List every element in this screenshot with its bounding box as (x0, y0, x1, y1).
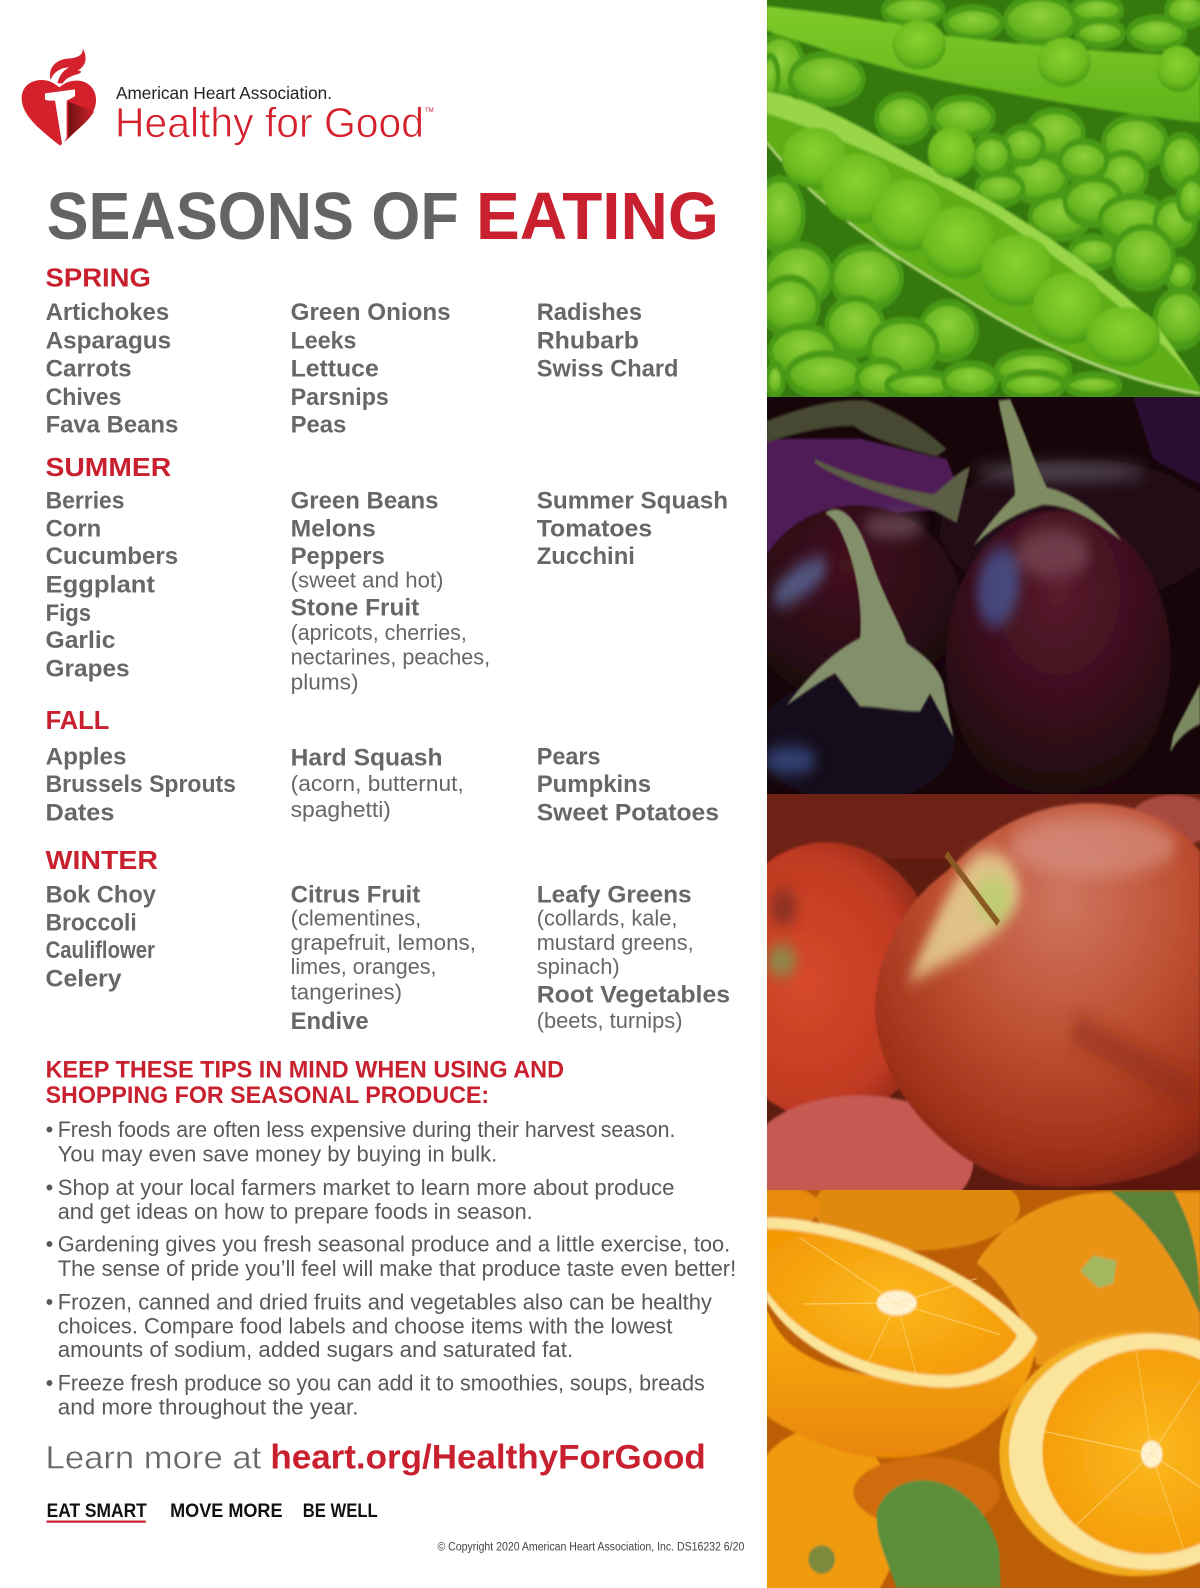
list: spring column 1: Fava Beans (46, 411, 178, 438)
tip 3 (46, 1232, 736, 1281)
tip 1: You may even save money by buying in bulk. (58, 1142, 497, 1167)
list: summer column 2: plums) (291, 670, 358, 695)
list: summer column 1 (46, 487, 178, 682)
list: winter column 1 (46, 881, 156, 992)
tip 3: • (46, 1232, 53, 1257)
title: SEASONS OF (47, 180, 459, 254)
list: spring column 2 (291, 299, 451, 438)
tip 1: • (46, 1117, 53, 1142)
list: summer column 2: nectarines, peaches, (291, 644, 490, 669)
list: spring column 3: Swiss Chard (537, 356, 678, 383)
heading: spring: SPRING (46, 263, 151, 293)
list: winter column 1: Bok Choy (46, 881, 156, 908)
heading: winter: WINTER (46, 845, 158, 875)
list: winter column 3: spinach) (537, 954, 620, 979)
list: fall column 1: Apples (46, 744, 127, 771)
heading: tips (46, 1056, 564, 1109)
list: fall column 2: spaghetti) (291, 797, 391, 822)
list: spring column 1 (46, 299, 178, 438)
list: summer column 1: Eggplant (46, 571, 155, 598)
heading: summer: SUMMER (46, 452, 171, 482)
list: fall column 1: Dates (46, 799, 114, 826)
list: summer column 2: Melons (291, 516, 376, 543)
list: summer column 2: Peppers (291, 543, 385, 570)
text block: tips list (46, 1117, 736, 1420)
list: spring column 1: Chives (46, 384, 122, 411)
call to action: learn more: heart.org/HealthyForGood (270, 1438, 706, 1476)
tagline: eat smart, move more, be well: MOVE MORE (170, 1501, 283, 1522)
call to action: learn more (46, 1438, 706, 1476)
tip 2: and get ideas on how to prepare foods in season. (58, 1199, 533, 1224)
list: summer column 2: (sweet and hot) (291, 567, 444, 592)
list: winter column 2: limes, oranges, (291, 954, 436, 979)
heading: fall: FALL (46, 705, 109, 735)
list: summer column 2: Stone Fruit (291, 595, 419, 622)
heading: tips: KEEP THESE TIPS IN MIND WHEN USING AND (46, 1056, 564, 1083)
list: fall column 2 (291, 745, 464, 822)
list: spring column 1: Carrots (46, 356, 132, 383)
tip 4: amounts of sodium, added sugars and saturated fat. (58, 1337, 573, 1362)
tip 4: Frozen, canned and dried fruits and vegetables also can be healthy (58, 1289, 712, 1314)
tip 5: • (46, 1370, 53, 1395)
list: summer column 1: Corn (46, 516, 101, 543)
list: winter column 2: Citrus Fruit (291, 881, 420, 908)
tip 5: Freeze fresh produce so you can add it to smoothies, soups, breads (58, 1370, 705, 1395)
tip 2 (46, 1175, 674, 1224)
tagline: eat smart, move more, be well: BE WELL (303, 1501, 378, 1522)
list: fall column 3: Sweet Potatoes (537, 799, 719, 826)
list: summer column 2 (291, 487, 490, 695)
list: fall column 1: Brussels Sprouts (46, 771, 236, 798)
photo: eggplants (752, 395, 1200, 806)
list: fall column 1 (46, 744, 236, 826)
list: summer column 1: Grapes (46, 655, 130, 682)
list: spring column 3: Rhubarb (537, 327, 639, 354)
list: summer column 1: Garlic (46, 627, 115, 654)
tip 5 (46, 1370, 705, 1420)
list: spring column 2: Parsnips (291, 384, 389, 411)
list: winter column 3: Root Vegetables (537, 982, 730, 1009)
title: EATING (476, 180, 719, 254)
list: fall column 3 (537, 744, 719, 826)
call to action: learn more: Learn more at (46, 1439, 261, 1475)
list: summer column 1: Berries (46, 487, 125, 514)
list: summer column 2: (apricots, cherries, (291, 620, 467, 645)
tip 4: • (46, 1289, 53, 1314)
list: summer column 2: Green Beans (291, 487, 438, 514)
list: spring column 1: Artichokes (46, 299, 169, 326)
list: summer column 3: Zucchini (537, 543, 635, 570)
trademark: TM (425, 108, 434, 114)
section: winter (46, 845, 730, 1035)
list: spring column 2: Leeks (291, 327, 356, 354)
list: winter column 3 (537, 881, 730, 1033)
list: spring column 2: Green Onions (291, 299, 451, 326)
heading: tips: SHOPPING FOR SEASONAL PRODUCE: (46, 1082, 489, 1109)
tip 2: Shop at your local farmers market to learn more about produce (58, 1175, 674, 1200)
logo: American Heart Association Healthy for Good (22, 48, 434, 146)
list: fall column 2: (acorn, butternut, (291, 771, 464, 796)
list: summer column 1: Cucumbers (46, 543, 178, 570)
list: winter column 3: mustard greens, (537, 930, 694, 955)
list: winter column 2: Endive (291, 1008, 369, 1035)
list: winter column 3: Leafy Greens (537, 881, 692, 908)
list: winter column 3: (collards, kale, (537, 906, 677, 931)
tip 2: • (46, 1175, 53, 1200)
section: spring (46, 263, 678, 438)
section: summer (46, 452, 728, 695)
tip 3: The sense of pride you’ll feel will make that produce taste even better! (58, 1256, 736, 1281)
section: fall (46, 705, 719, 826)
tagline: eat smart, move more, be well: EAT SMART (47, 1501, 147, 1522)
list: summer column 1: Figs (46, 600, 91, 627)
list: winter column 2: grapefruit, lemons, (291, 930, 476, 955)
photo: red apples (712, 790, 1200, 1228)
list: winter column 2 (291, 881, 476, 1035)
tagline: eat smart, move more, be well (47, 1501, 378, 1523)
list: summer column 3: Tomatoes (537, 516, 652, 543)
list: winter column 1: Celery (46, 965, 122, 992)
brand text: American Heart Association: American Heart Association. (116, 83, 332, 103)
tip 5: and more throughout the year. (58, 1395, 358, 1420)
tip 1 (46, 1117, 675, 1167)
list: winter column 1: Broccoli (46, 910, 137, 937)
list: winter column 1: Cauliflower (46, 937, 155, 964)
list: winter column 2: (clementines, (291, 906, 421, 931)
brand text: Healthy for Good: Healthy for Good (115, 99, 424, 146)
icon: heart and torch (22, 48, 96, 146)
list: summer column 3: Summer Squash (537, 487, 728, 514)
list: summer column 3 (537, 487, 728, 570)
tip 3: Gardening gives you fresh seasonal produce and a little exercise, too. (58, 1232, 730, 1257)
list: spring column 1: Asparagus (46, 327, 171, 354)
photo: oranges (767, 1190, 1200, 1588)
tip 4 (46, 1289, 712, 1362)
list: winter column 3: (beets, turnips) (537, 1008, 683, 1033)
list: fall column 3: Pears (537, 744, 601, 771)
list: fall column 2: Hard Squash (291, 745, 443, 772)
photo: green peas in pods (757, 0, 1200, 398)
list: fall column 3: Pumpkins (537, 771, 651, 798)
copyright: © Copyright 2020 American Heart Association, Inc. DS16232 6/20 (437, 1540, 745, 1553)
list: spring column 3 (537, 299, 678, 383)
tip 4: choices. Compare food labels and choose items with the lowest (58, 1314, 672, 1339)
list: spring column 2: Lettuce (291, 356, 379, 383)
list: spring column 2: Peas (291, 411, 346, 438)
list: winter column 2: tangerines) (291, 979, 402, 1004)
list: spring column 3: Radishes (537, 299, 642, 326)
apple stem (946, 854, 998, 923)
tip 1: Fresh foods are often less expensive during their harvest season. (58, 1117, 675, 1142)
